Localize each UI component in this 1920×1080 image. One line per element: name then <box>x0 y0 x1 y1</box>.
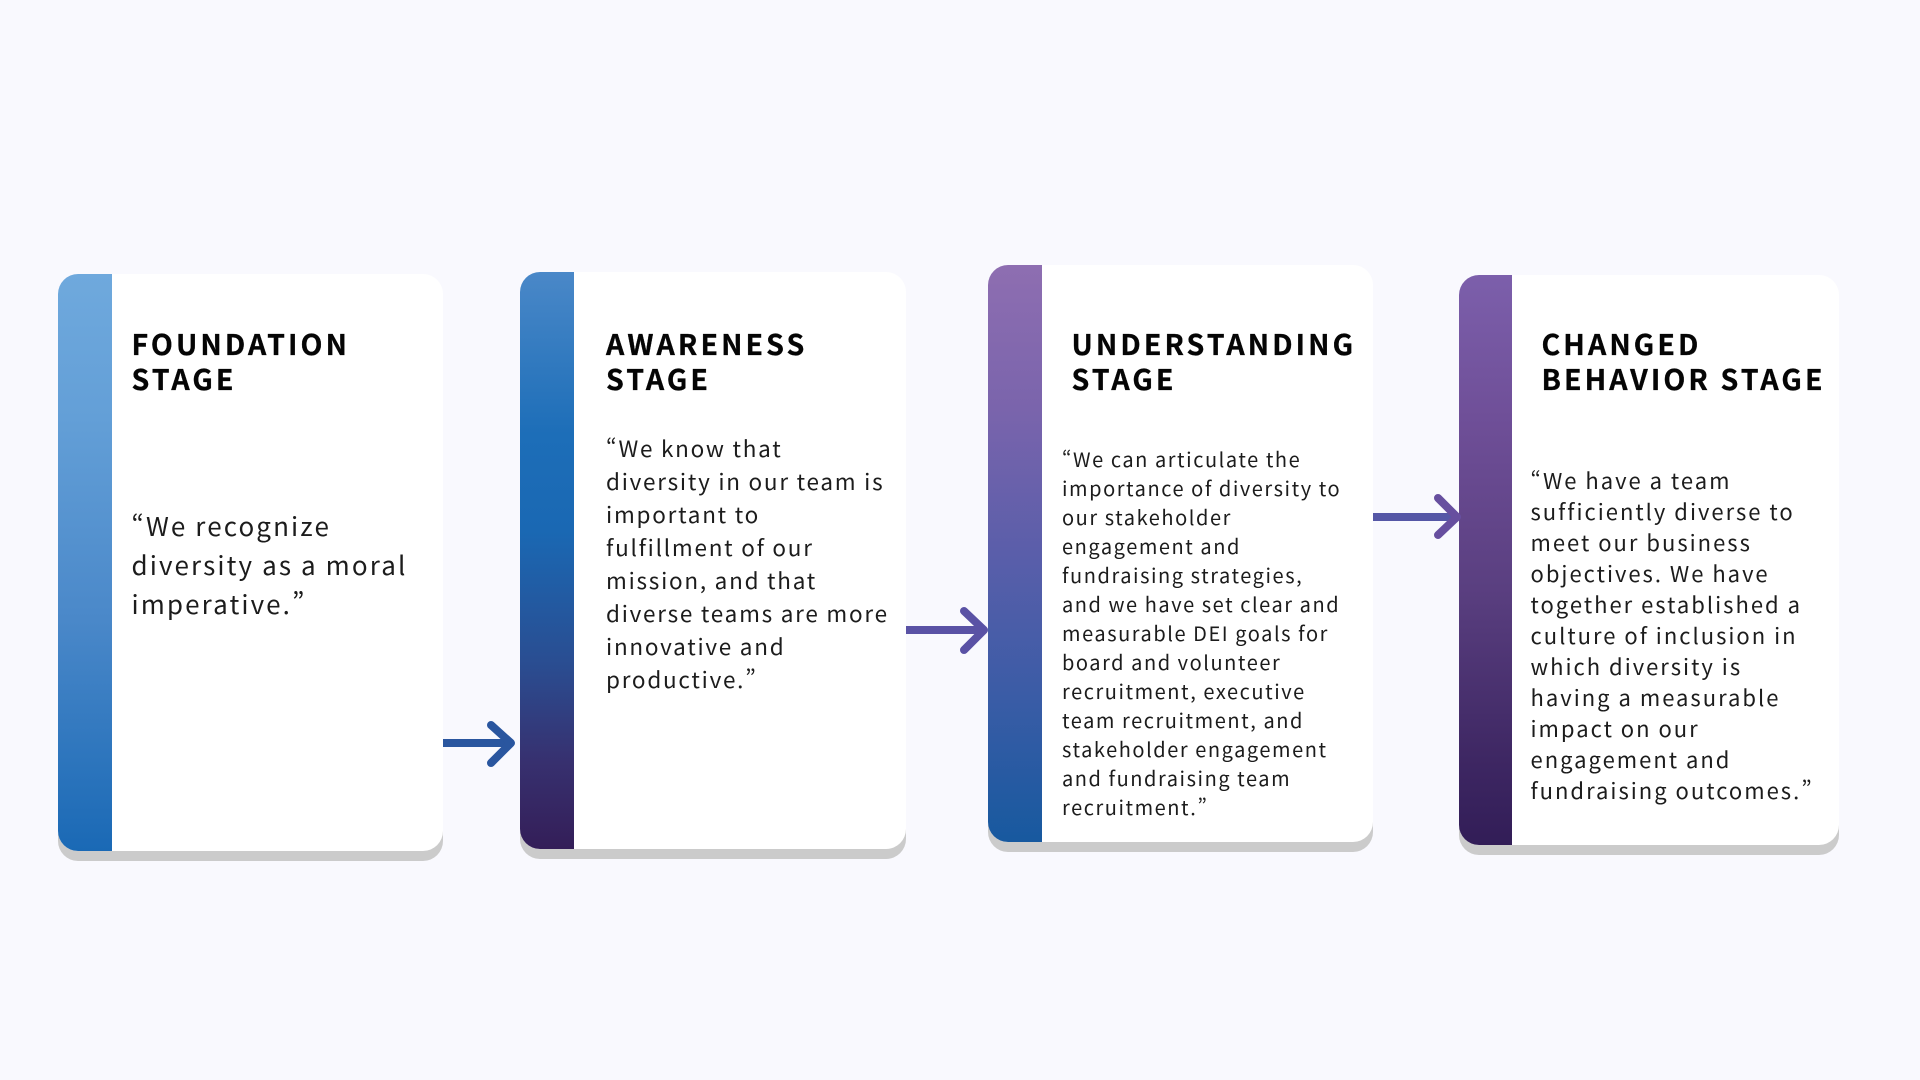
text: foundation quote <box>132 507 407 622</box>
text: foundation quote: imperative.” <box>132 585 306 622</box>
text: understanding quote: and we have set clear and <box>1062 589 1340 618</box>
heading: awareness stage: STAGE <box>606 358 711 399</box>
panel: understanding stage card <box>988 264 1373 842</box>
text: understanding quote <box>1062 444 1341 821</box>
text: understanding quote: fundraising strategies, <box>1062 560 1303 589</box>
foundation gradient bar <box>58 274 112 851</box>
text: awareness quote: innovative and <box>606 630 785 662</box>
text: understanding quote: team recruitment, and <box>1062 705 1304 734</box>
text: changed behavior quote: meet our business <box>1530 526 1752 558</box>
text: changed behavior quote: together established a <box>1530 588 1802 620</box>
text: changed behavior quote: engagement and <box>1530 743 1731 775</box>
text: understanding quote: our stakeholder <box>1062 502 1232 531</box>
text: understanding quote: “We can articulate the <box>1062 444 1301 473</box>
heading: changed behavior stage: BEHAVIOR STAGE <box>1542 358 1826 399</box>
text: changed behavior quote: culture of inclusion in <box>1530 619 1798 651</box>
heading: understanding stage <box>1072 323 1356 399</box>
text: awareness quote: mission, and that <box>606 564 817 596</box>
text: understanding quote: recruitment.” <box>1062 792 1208 821</box>
text: awareness quote: fulfillment of our <box>606 531 814 563</box>
heading: understanding stage: UNDERSTANDING <box>1072 323 1356 364</box>
understanding gradient bar <box>988 264 1042 842</box>
changed behavior gradient bar <box>1459 275 1512 845</box>
text: understanding quote: importance of diversity to <box>1062 473 1341 502</box>
heading: changed behavior stage <box>1542 323 1826 399</box>
text: understanding quote: measurable DEI goals for <box>1062 618 1329 647</box>
text: awareness quote: “We know that <box>606 432 782 464</box>
text: changed behavior quote: sufficiently diverse to <box>1530 495 1795 527</box>
heading: changed behavior stage: CHANGED <box>1542 323 1701 364</box>
heading: awareness stage <box>606 323 807 399</box>
text: awareness quote: diversity in our team is <box>606 465 884 497</box>
text: changed behavior quote: “We have a team <box>1530 464 1732 496</box>
text: foundation quote: diversity as a moral <box>132 546 407 583</box>
arrow: understanding to changed behavior <box>1373 498 1457 535</box>
heading: foundation stage <box>132 323 350 399</box>
text: awareness quote: diverse teams are more <box>606 597 889 629</box>
text: understanding quote: stakeholder engagement <box>1062 734 1328 763</box>
heading: awareness stage: AWARENESS <box>606 323 807 364</box>
panel: awareness stage card <box>520 272 906 848</box>
text: awareness quote: important to <box>606 498 760 530</box>
text: changed behavior quote: which diversity is <box>1530 650 1742 682</box>
heading: foundation stage: STAGE <box>132 358 237 399</box>
awareness gradient bar <box>520 272 574 848</box>
text: understanding quote: board and volunteer <box>1062 647 1281 676</box>
panel: changed behavior stage card <box>1459 275 1839 845</box>
heading: understanding stage: STAGE <box>1072 358 1177 399</box>
text: changed behavior quote: impact on our <box>1530 712 1700 744</box>
text: understanding quote: and fundraising team <box>1062 763 1291 792</box>
heading: foundation stage: FOUNDATION <box>132 323 350 364</box>
arrow: awareness to understanding <box>906 611 984 650</box>
text: changed behavior quote: having a measurable <box>1530 681 1780 713</box>
text: changed behavior quote: objectives. We have <box>1530 557 1770 589</box>
panel: foundation stage card <box>58 274 443 851</box>
text: awareness quote: productive.” <box>606 663 758 695</box>
text: understanding quote: engagement and <box>1062 531 1241 560</box>
text: foundation quote: “We recognize <box>132 507 331 544</box>
text: understanding quote: recruitment, executive <box>1062 676 1306 705</box>
text: changed behavior quote: fundraising outcomes.” <box>1530 774 1814 806</box>
text: changed behavior quote <box>1530 464 1814 806</box>
text: awareness quote <box>606 432 889 695</box>
